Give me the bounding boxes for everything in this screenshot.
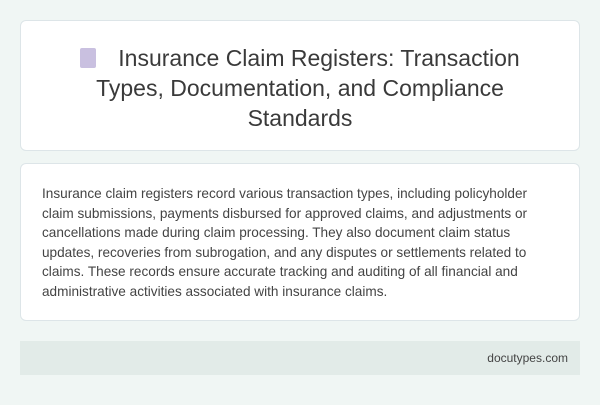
footer: docutypes.com — [487, 351, 568, 365]
title panel — [20, 20, 580, 151]
title: Types, Documentation, and Compliance — [96, 75, 504, 101]
title — [80, 45, 520, 131]
description text: Insurance claim registers record various transaction types, including policyholder claim submissions, payments disbursed for approved claims, and adjustments or cancellations made during claim processing. They also document claim status updates, recoveries from subrogation, and any disputes or settlements related to claims. These records ensure accurate tracking and auditing of all financial and administrative activities associated with insurance claims. — [42, 186, 527, 298]
title: Insurance Claim Registers: Transaction — [118, 45, 520, 71]
description panel — [20, 163, 580, 321]
icon: document — [80, 48, 96, 68]
title: Standards — [248, 105, 352, 131]
footer — [20, 341, 580, 375]
